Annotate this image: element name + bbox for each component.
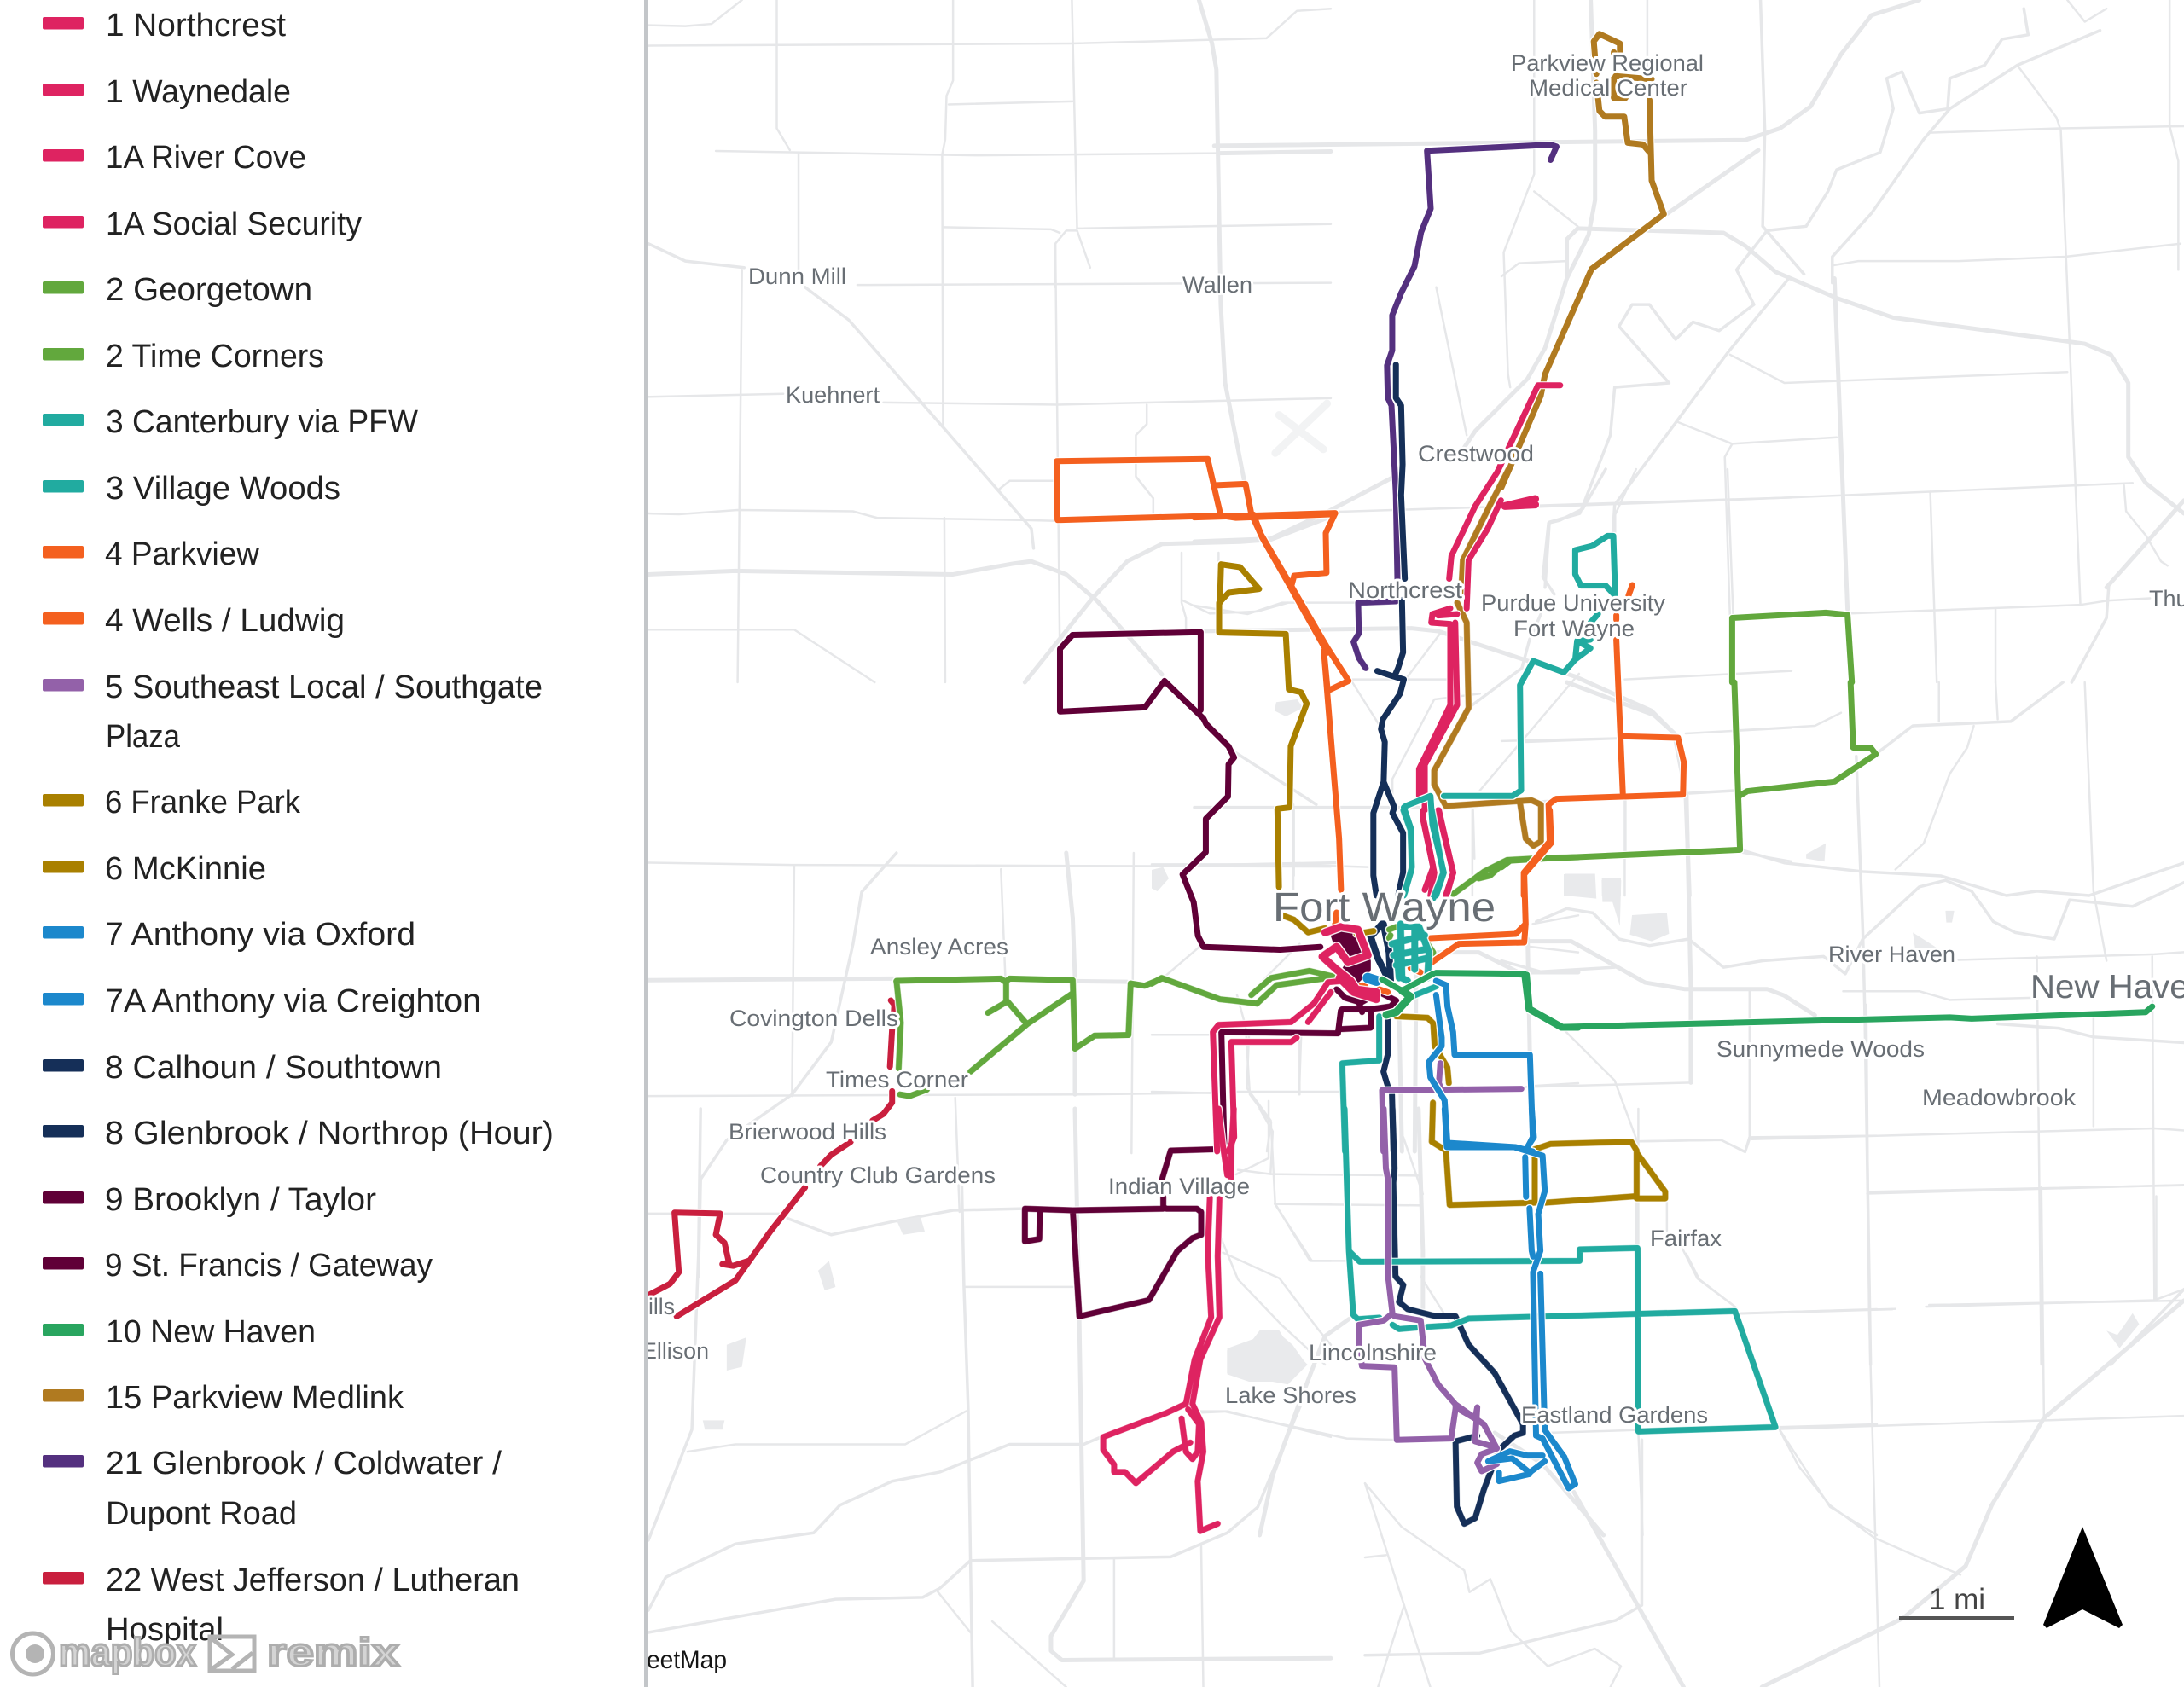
- map place labels: Country Club Gardens: [760, 1162, 996, 1188]
- map place labels: Fort Wayne: [1273, 885, 1496, 930]
- legend row: 10 New Haven: 10 New Haven: [106, 1314, 316, 1350]
- background road network: [648, 0, 2184, 1687]
- mapbox wordmark: mapbox: [59, 1630, 196, 1674]
- legend row: 8 Glenbrook / Northrop (Hour): 8 Glenbrook / Northrop (Hour): [105, 1116, 554, 1151]
- route 7 Anthony via Oxford and Creighton: [1368, 978, 1575, 1488]
- route 2 Georgetown and Time Corners: [897, 612, 1876, 1096]
- legend row: 4 Parkview: 4 Parkview: [105, 536, 260, 572]
- route 3 Canterbury via PFW and Village Woods: [1342, 536, 1775, 1431]
- scale bar: 1 mi: [1929, 1583, 1985, 1616]
- route 21 Glenbrook / Coldwater / Dupont Road: [1354, 145, 1556, 668]
- remix wordmark: remix: [267, 1630, 400, 1674]
- legend row: 6 McKinnie: 6 McKinnie: [105, 851, 266, 887]
- route 5 Southeast Local / Southgate Plaza: [1359, 1064, 1521, 1471]
- legend row: 7 Anthony via Oxford: 7 Anthony via Oxford: [105, 917, 415, 953]
- legend row: 5 Southeast Local / Southgate Plaza: Plaza: [106, 719, 181, 755]
- legend row: 22 West Jefferson / Lutheran Hospital: [43, 1562, 520, 1648]
- legend row: 9 Brooklyn / Taylor: 9 Brooklyn / Taylor: [105, 1182, 376, 1218]
- map place labels: Sunnymede Woods: [1716, 1036, 1925, 1062]
- legend row: 3 Village Woods: 3 Village Woods: [106, 471, 340, 507]
- map place labels: Fairfax: [1650, 1226, 1722, 1251]
- legend row: 8 Calhoun / Southtown: 8 Calhoun / Southtown: [105, 1050, 442, 1086]
- map place labels: ills: [648, 1294, 675, 1319]
- map place labels: Eastland Gardens: [1521, 1402, 1708, 1428]
- map place labels: Ansley Acres: [870, 934, 1008, 959]
- legend row: 1 Northcrest: 1 Northcrest: [106, 8, 286, 43]
- mapbox and remix watermark: [12, 1630, 400, 1674]
- legend row: 15 Parkview Medlink: 15 Parkview Medlink: [106, 1380, 404, 1416]
- legend row: 9 St. Francis / Gateway: 9 St. Francis / Gateway: [105, 1248, 433, 1284]
- legend row: 1 Waynedale: 1 Waynedale: [106, 74, 291, 110]
- route 1 Northcrest, Waynedale, River Cove and Social Security: [1103, 386, 1560, 1531]
- map place labels: Wallen: [1182, 272, 1252, 298]
- route 8 Calhoun / Southtown and Glenbrook / Northrop: [1371, 365, 1523, 1524]
- map place labels: Crestwood: [1418, 441, 1534, 467]
- route 9 Brooklyn / Taylor and St. Francis / Gateway: [1025, 632, 1397, 1316]
- scale bar: [1899, 1583, 2014, 1620]
- map place labels: Lake Shores: [1225, 1383, 1356, 1408]
- map place labels: Meadowbrook: [1922, 1085, 2077, 1110]
- map place labels: Medical Center: [1529, 75, 1687, 101]
- legend row: 5 Southeast Local / Southgate Plaza: [43, 670, 543, 755]
- north arrow: [2043, 1527, 2123, 1628]
- airfield marking: [1275, 403, 1327, 453]
- map place labels: Ellison: [642, 1338, 709, 1364]
- map place labels: Kuehnert: [786, 382, 880, 408]
- map place labels: Indian Village: [1108, 1174, 1250, 1199]
- legend row: 6 Franke Park: 6 Franke Park: [105, 785, 301, 820]
- legend row: 3 Canterbury via PFW: 3 Canterbury via PFW: [106, 404, 418, 440]
- map place labels: [642, 50, 2184, 1428]
- map place labels: Times Corner: [826, 1067, 968, 1093]
- route 4 Parkview and Wells / Ludwig: [1057, 459, 1684, 992]
- legend row: 21 Glenbrook / Coldwater / Dupont Road: Dupont Road: [106, 1496, 297, 1532]
- legend row: 2 Time Corners: 2 Time Corners: [106, 339, 324, 374]
- map place labels: Purdue University: [1481, 590, 1665, 616]
- map place labels: Covington Dells: [729, 1006, 898, 1031]
- legend row: 4 Wells / Ludwig: 4 Wells / Ludwig: [105, 603, 345, 639]
- map place labels: River Haven: [1828, 942, 1955, 967]
- map attribution: eetMap: [647, 1646, 727, 1674]
- map place labels: Fort Wayne: [1513, 616, 1635, 641]
- icon: remix logo: [210, 1637, 254, 1671]
- legend row: 21 Glenbrook / Coldwater / Dupont Road: [43, 1446, 502, 1532]
- panel: legend background: [0, 0, 648, 1687]
- map place labels: Dunn Mill: [748, 264, 846, 289]
- legend row: 22 West Jefferson / Lutheran Hospital: 22 West Jefferson / Lutheran: [106, 1562, 520, 1598]
- map place labels: Brierwood Hills: [729, 1119, 886, 1145]
- legend row: 1A Social Security: 1A Social Security: [106, 206, 362, 242]
- legend row: 1A River Cove: 1A River Cove: [106, 140, 306, 176]
- legend row: 5 Southeast Local / Southgate Plaza: 5 Southeast Local / Southgate: [105, 670, 543, 705]
- route 6 Franke Park and McKinnie: [1219, 565, 1665, 1205]
- icon: mapbox logo: [12, 1633, 53, 1674]
- map place labels: Lincolnshire: [1309, 1340, 1437, 1365]
- map place labels: Northcrest: [1348, 577, 1463, 603]
- legend row: 22 West Jefferson / Lutheran Hospital: Hospital: [106, 1612, 224, 1648]
- legend row: 21 Glenbrook / Coldwater / Dupont Road: 21 Glenbrook / Coldwater /: [106, 1446, 502, 1481]
- map place labels: Parkview Regional: [1511, 50, 1704, 76]
- route 22 West Jefferson / Lutheran Hospital: [648, 1000, 894, 1316]
- legend row: 7A Anthony via Creighton: 7A Anthony via Creighton: [105, 983, 481, 1019]
- legend row: 2 Georgetown: 2 Georgetown: [106, 272, 312, 308]
- route 10 New Haven: [1382, 973, 2152, 1028]
- route 15 Parkview Medlink: [1434, 34, 1664, 846]
- legend: [43, 8, 554, 1648]
